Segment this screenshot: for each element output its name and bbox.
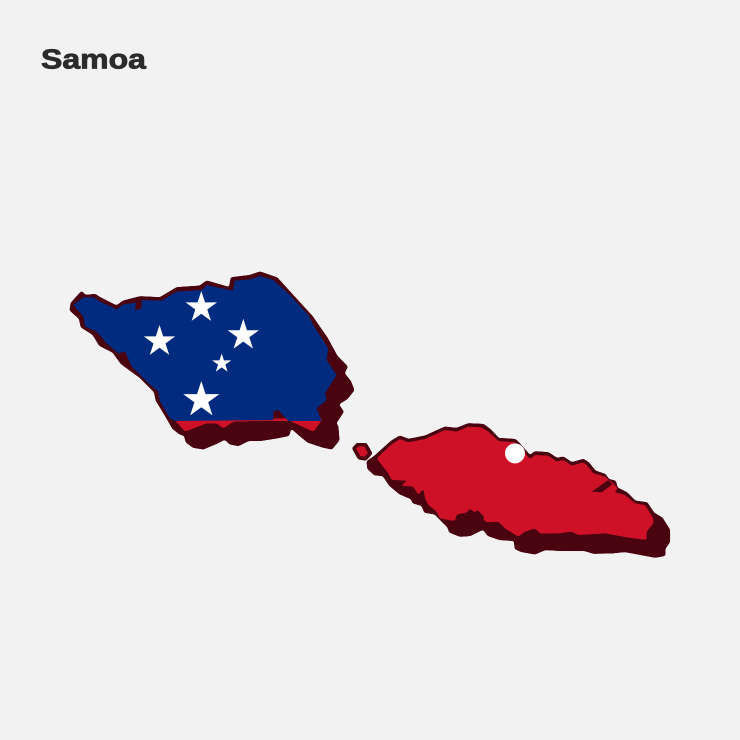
star: right xyxy=(228,319,259,349)
island shadow and outline xyxy=(71,273,353,448)
star: bottom xyxy=(183,381,219,415)
title: Samoa xyxy=(41,44,146,74)
map: western island with flag xyxy=(71,273,353,448)
small islet outline xyxy=(353,444,371,459)
island shadow and outline xyxy=(368,424,669,557)
red island fill xyxy=(377,427,653,540)
white capital marker xyxy=(505,443,525,463)
small islet fill xyxy=(356,446,368,457)
star: top xyxy=(186,291,217,321)
map: eastern island xyxy=(353,424,669,557)
blue flag canton xyxy=(73,276,337,421)
dark inlet xyxy=(592,480,612,492)
red flag field xyxy=(173,418,323,432)
star: left xyxy=(144,325,175,355)
star: small xyxy=(212,354,231,372)
